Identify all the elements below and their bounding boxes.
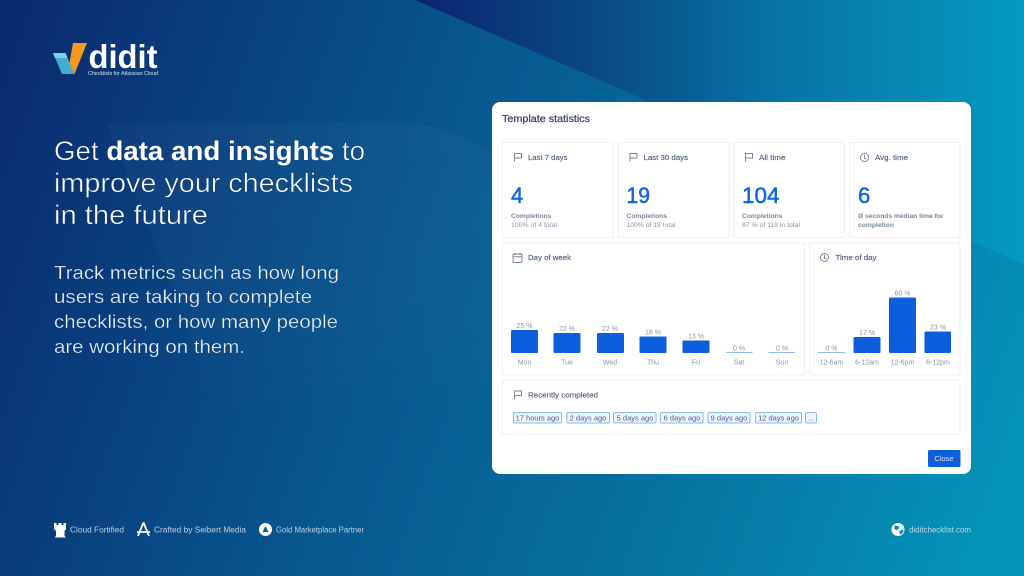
bar chart: day of week: 22 % <box>559 326 575 333</box>
footer: crafted by: Crafted by Seibert Media <box>154 526 247 534</box>
heading: in the future <box>54 200 208 230</box>
bar chart: day of week: 22 % <box>602 326 618 333</box>
bar chart: day of week: Wed <box>603 360 617 366</box>
panel: average time <box>850 142 960 238</box>
panel: last 30 days: 100% of 19 total <box>626 222 676 229</box>
panel: last 30 days <box>618 142 729 238</box>
heading: Get data and insights to <box>54 136 365 166</box>
bar chart: time of day: 17 % <box>859 330 875 337</box>
body text: are working on them. <box>54 336 245 357</box>
panel: all time: Completions <box>742 213 783 220</box>
panel: last 7 days <box>502 142 613 238</box>
bar chart: day of week <box>511 323 795 366</box>
icon: flag <box>746 154 752 162</box>
heading: improve your checklists <box>54 168 353 198</box>
bar chart: time of day: 12-6am <box>820 360 844 366</box>
panel: last 7 days: 4 <box>511 183 523 208</box>
panel: time of day chart <box>810 243 960 375</box>
panel: recently completed <box>502 380 960 434</box>
panel: last 7 days: 100% of 4 total <box>511 222 558 229</box>
icon: clock <box>820 254 828 262</box>
tagline: Checklists for Atlassian Cloud <box>88 71 158 77</box>
close button <box>928 450 960 467</box>
icon: clock <box>860 154 868 162</box>
footer: website: diditchecklist.com <box>909 526 971 534</box>
bar chart: day of week: 0 % <box>733 346 745 352</box>
footer: crafted by <box>137 522 247 536</box>
panel: last 7 days: Completions <box>511 213 552 220</box>
body text <box>54 262 339 357</box>
panel: last 30 days: Completions <box>626 213 667 220</box>
panel: recently completed: Recently completed <box>528 390 598 400</box>
footer: website <box>892 523 971 536</box>
tags: 9 days ago <box>711 414 747 422</box>
footer: marketplace partner <box>259 523 364 536</box>
bar chart: day of week: Sat <box>734 360 744 366</box>
wordmark: didit <box>88 38 158 75</box>
tags: 5 days ago <box>617 414 653 422</box>
panel: day of week chart: Day of week <box>528 253 571 262</box>
panel: average time: completion <box>858 222 894 229</box>
icon: tower <box>54 523 66 538</box>
tags: 12 days ago <box>758 414 799 422</box>
bar chart: time of day: 60 % <box>895 290 910 298</box>
icon: compass <box>137 522 150 536</box>
panel: last 30 days: 19 <box>626 183 650 208</box>
footer: cloud fortified: Cloud Fortified <box>70 526 124 534</box>
close button: Close <box>934 454 954 463</box>
heading <box>54 136 365 230</box>
bar chart: day of week: 13 % <box>688 334 704 340</box>
bar chart: day of week: Thu <box>647 360 659 366</box>
bar chart: day of week: Sun <box>776 360 788 366</box>
bar chart: day of week: Fri <box>692 360 701 366</box>
tags: ... <box>808 414 814 422</box>
icon: didit check mark <box>53 43 87 74</box>
bar chart: time of day: 6-12pm <box>926 360 950 366</box>
panel: last 7 days: Last 7 days <box>528 153 568 162</box>
icon: calendar <box>513 253 522 262</box>
bar chart: day of week: 0 % <box>776 346 788 352</box>
body text: Track metrics such as how long <box>54 262 339 283</box>
panel: template statistics dialog <box>492 102 971 474</box>
footer: marketplace partner: Gold Marketplace Partner <box>276 526 364 534</box>
panel: average time: Ø seconds median time for <box>858 213 944 220</box>
bar chart: day of week: 25 % <box>517 323 532 330</box>
logo <box>53 38 158 77</box>
bar chart: time of day: 23 % <box>930 324 946 332</box>
icon: globe <box>892 523 904 536</box>
bar chart: time of day: 12-6pm <box>891 360 915 366</box>
bar chart: time of day: 0 % <box>825 346 838 352</box>
panel: last 30 days: Last 30 days <box>644 153 688 162</box>
tags <box>514 412 816 423</box>
panel: day of week chart <box>502 243 804 375</box>
tags: 2 days ago <box>570 414 606 422</box>
bar chart: day of week: Mon <box>518 360 531 366</box>
icon: partner badge <box>259 523 272 536</box>
bar chart: time of day: 6-12am <box>855 360 879 366</box>
panel: all time: 104 <box>742 183 780 208</box>
panel: time of day chart: Time of day <box>836 253 877 262</box>
panel: average time: 6 <box>858 183 870 208</box>
icon: flag <box>514 391 522 399</box>
body text: users are taking to complete <box>54 286 312 307</box>
bar chart: day of week: 18 % <box>645 330 661 336</box>
icon: flag <box>514 154 522 162</box>
panel: all time: 87 % of 119 in total <box>742 222 801 229</box>
panel: all time <box>734 142 844 238</box>
dialog title: Template statistics <box>502 113 590 125</box>
tags: 17 hours ago <box>516 414 559 422</box>
panel: average time: Avg. time <box>875 153 908 162</box>
tags: 6 days ago <box>664 414 700 422</box>
icon: flag <box>630 154 637 162</box>
bar chart: time of day <box>818 290 951 366</box>
body text: checklists, or how many people <box>54 311 338 332</box>
footer: cloud fortified <box>54 523 124 538</box>
bar chart: day of week: Tue <box>561 360 573 366</box>
panel: all time: All time <box>759 153 786 162</box>
